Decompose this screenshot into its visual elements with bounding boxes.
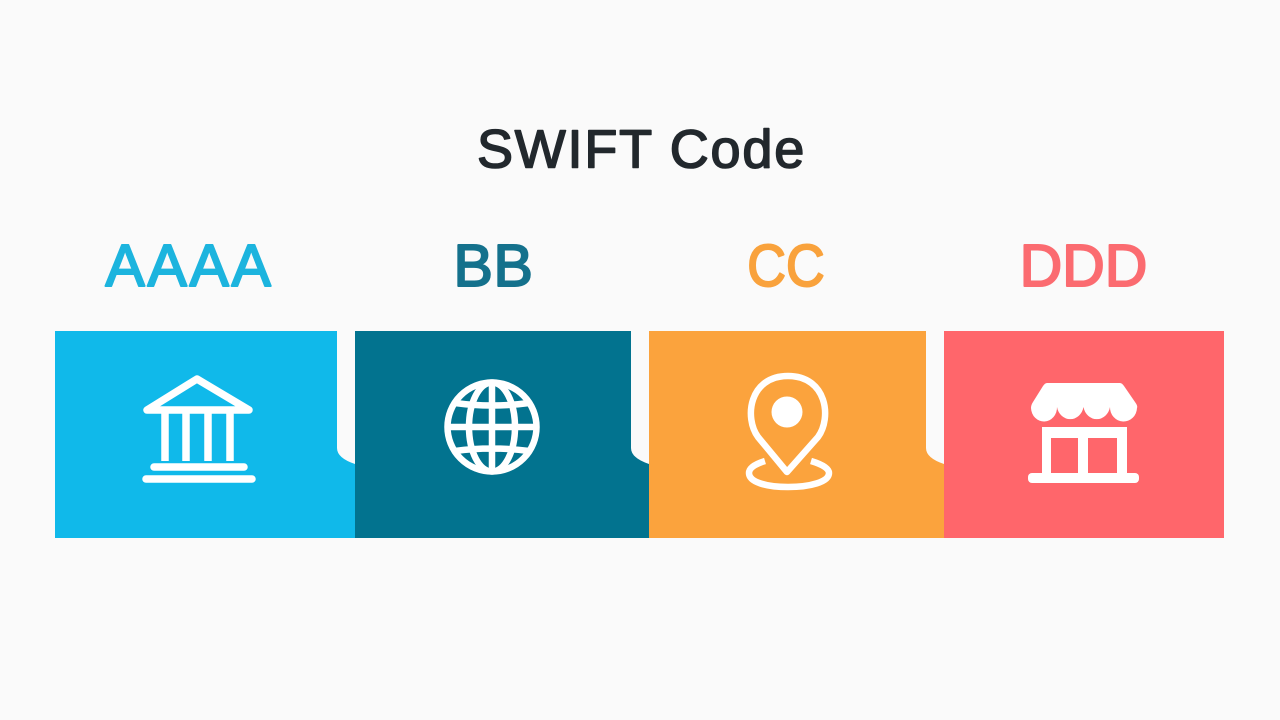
label: BB: BB bbox=[454, 233, 533, 299]
icon: globe bbox=[447, 382, 537, 472]
label: AAAA: AAAA bbox=[105, 233, 274, 299]
label: CC: CC bbox=[747, 233, 825, 299]
panel: branch code bbox=[944, 331, 1224, 538]
title: SWIFT Code bbox=[477, 120, 806, 180]
panel: location code bbox=[649, 331, 944, 538]
icon: bank bbox=[146, 379, 252, 479]
icon: location pin bbox=[749, 376, 829, 487]
panel: country code bbox=[355, 331, 649, 538]
icon: storefront bbox=[1028, 383, 1139, 483]
label: DDD: DDD bbox=[1020, 233, 1147, 299]
panel: bank code bbox=[55, 331, 355, 538]
